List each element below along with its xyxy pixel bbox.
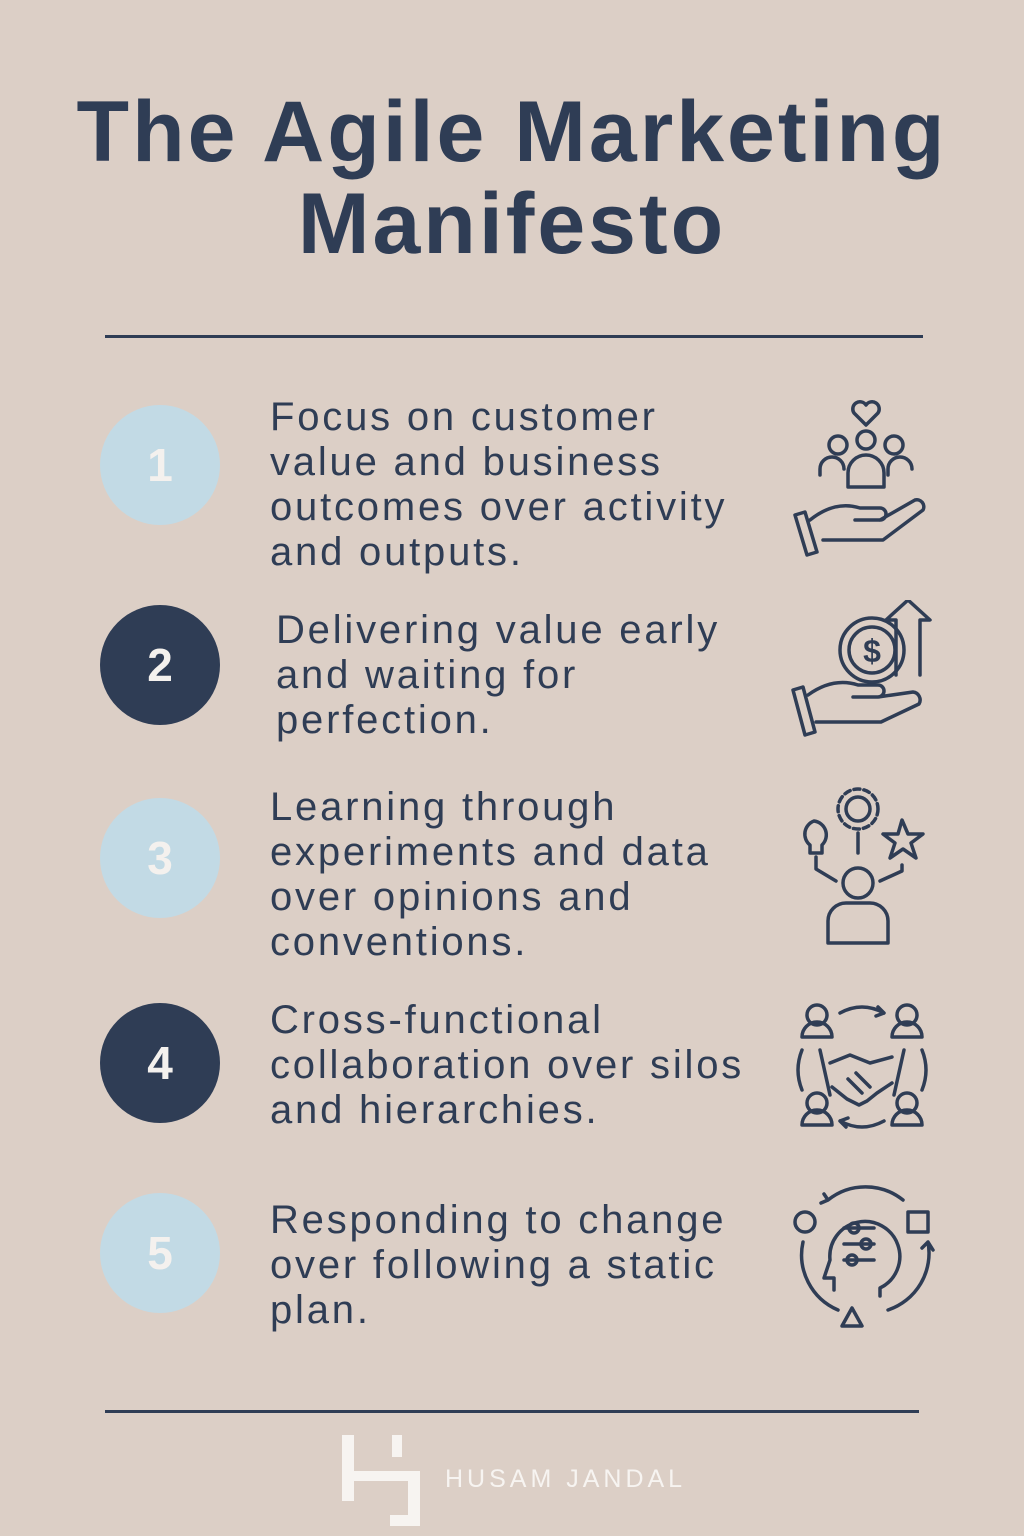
text 4 — [270, 998, 744, 1132]
item 3 — [100, 785, 925, 964]
number circle 4 — [100, 1003, 220, 1123]
number circle 5 — [100, 1193, 220, 1313]
title — [77, 84, 947, 272]
text 3: conventions. — [270, 920, 528, 964]
number circle 2 — [100, 605, 220, 725]
text 2 — [276, 608, 720, 742]
text 3 — [270, 785, 711, 964]
text 5 — [270, 1198, 726, 1332]
text 1 — [270, 395, 727, 574]
number circle 5: 5 — [147, 1227, 173, 1279]
title: Manifesto — [298, 176, 726, 272]
item 4 — [100, 998, 928, 1132]
item 2 — [100, 600, 932, 742]
number circle 4: 4 — [147, 1037, 173, 1089]
number circle 1: 1 — [147, 439, 173, 491]
text 4: collaboration over silos — [270, 1043, 744, 1087]
number circle 3 — [100, 798, 220, 918]
text 1: and outputs. — [270, 530, 524, 574]
text 1: outcomes over activity — [270, 485, 727, 529]
text 5: plan. — [270, 1288, 371, 1332]
text 1: value and business — [270, 440, 663, 484]
text 2: Delivering value early — [276, 608, 720, 652]
text 5: over following a static — [270, 1243, 717, 1287]
icon: head with gears cycle — [793, 1185, 935, 1328]
text 1: Focus on customer — [270, 395, 658, 439]
number circle 2: 2 — [147, 639, 173, 691]
number circle 3: 3 — [147, 832, 173, 884]
text 3: over opinions and — [270, 875, 633, 919]
logo name: HUSAM JANDAL — [445, 1465, 686, 1493]
logo — [342, 1435, 686, 1526]
text 3: Learning through — [270, 785, 617, 829]
text 4: Cross-functional — [270, 998, 604, 1042]
icon: handshake with people — [796, 1003, 928, 1129]
text 3: experiments and data — [270, 830, 711, 874]
text 2: perfection. — [276, 698, 494, 742]
icon: hand with coin and arrow — [791, 600, 932, 737]
item 5 — [100, 1185, 935, 1332]
text 2: and waiting for — [276, 653, 578, 697]
title: The Agile Marketing — [77, 84, 947, 180]
icon: person with gear bulb star — [803, 787, 925, 945]
text 5: Responding to change — [270, 1198, 726, 1242]
icon: hand with coin and arrow: $ — [863, 633, 881, 669]
number circle 1 — [100, 405, 220, 525]
logo mark HJ — [342, 1435, 420, 1526]
item 1 — [100, 395, 926, 574]
icon: hand with people and heart — [793, 400, 926, 557]
text 4: and hierarchies. — [270, 1088, 599, 1132]
